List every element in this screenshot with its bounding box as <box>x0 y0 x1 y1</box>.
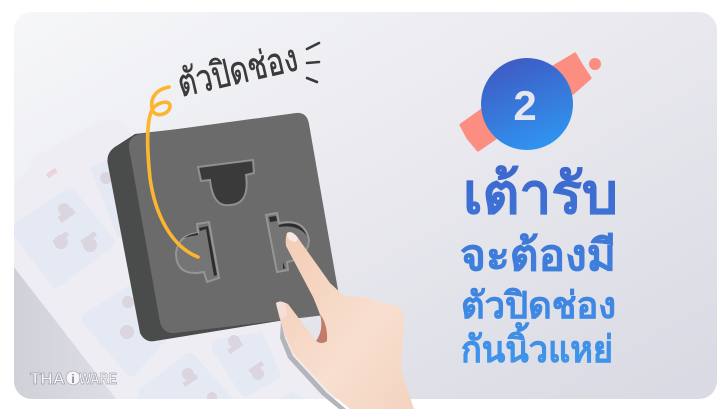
hand shape <box>276 232 414 409</box>
index nail <box>287 232 298 242</box>
strip body <box>116 322 338 399</box>
strip socket icons <box>52 172 264 402</box>
hand <box>276 232 414 409</box>
subheading line 2: ตัวปิดช่อง <box>461 285 616 326</box>
watermark logo: WARE <box>79 371 117 388</box>
left slot with shutter <box>176 222 219 282</box>
subheading line 1: จะต้องมี <box>460 232 616 280</box>
faded power strip <box>14 160 338 399</box>
right slot with shutter <box>266 213 309 272</box>
strip shadow <box>14 267 117 400</box>
heading <box>460 162 618 370</box>
thumb nail <box>276 302 287 319</box>
finger crease <box>316 314 327 343</box>
yellow pointer line <box>148 87 198 257</box>
top slot <box>198 160 254 205</box>
watermark logo: THA <box>30 371 65 388</box>
accent brush shape <box>461 54 601 150</box>
number: 2 <box>513 82 537 129</box>
heading: เต้ารับ <box>463 162 618 225</box>
socket side <box>107 115 340 341</box>
accent dot <box>589 58 601 70</box>
subheading line 3: กันนิ้วแหย่ <box>461 322 613 370</box>
handwritten label: ตัวปิดช่อง <box>174 37 302 106</box>
socket face <box>129 113 342 333</box>
number badge <box>481 58 573 150</box>
hand shadow <box>280 322 346 409</box>
socket <box>107 113 342 341</box>
watermark logo <box>30 371 117 388</box>
strip panels <box>14 158 306 400</box>
emphasis strokes <box>307 43 319 82</box>
watermark logo: i <box>71 372 75 386</box>
strip indicator <box>46 168 58 178</box>
